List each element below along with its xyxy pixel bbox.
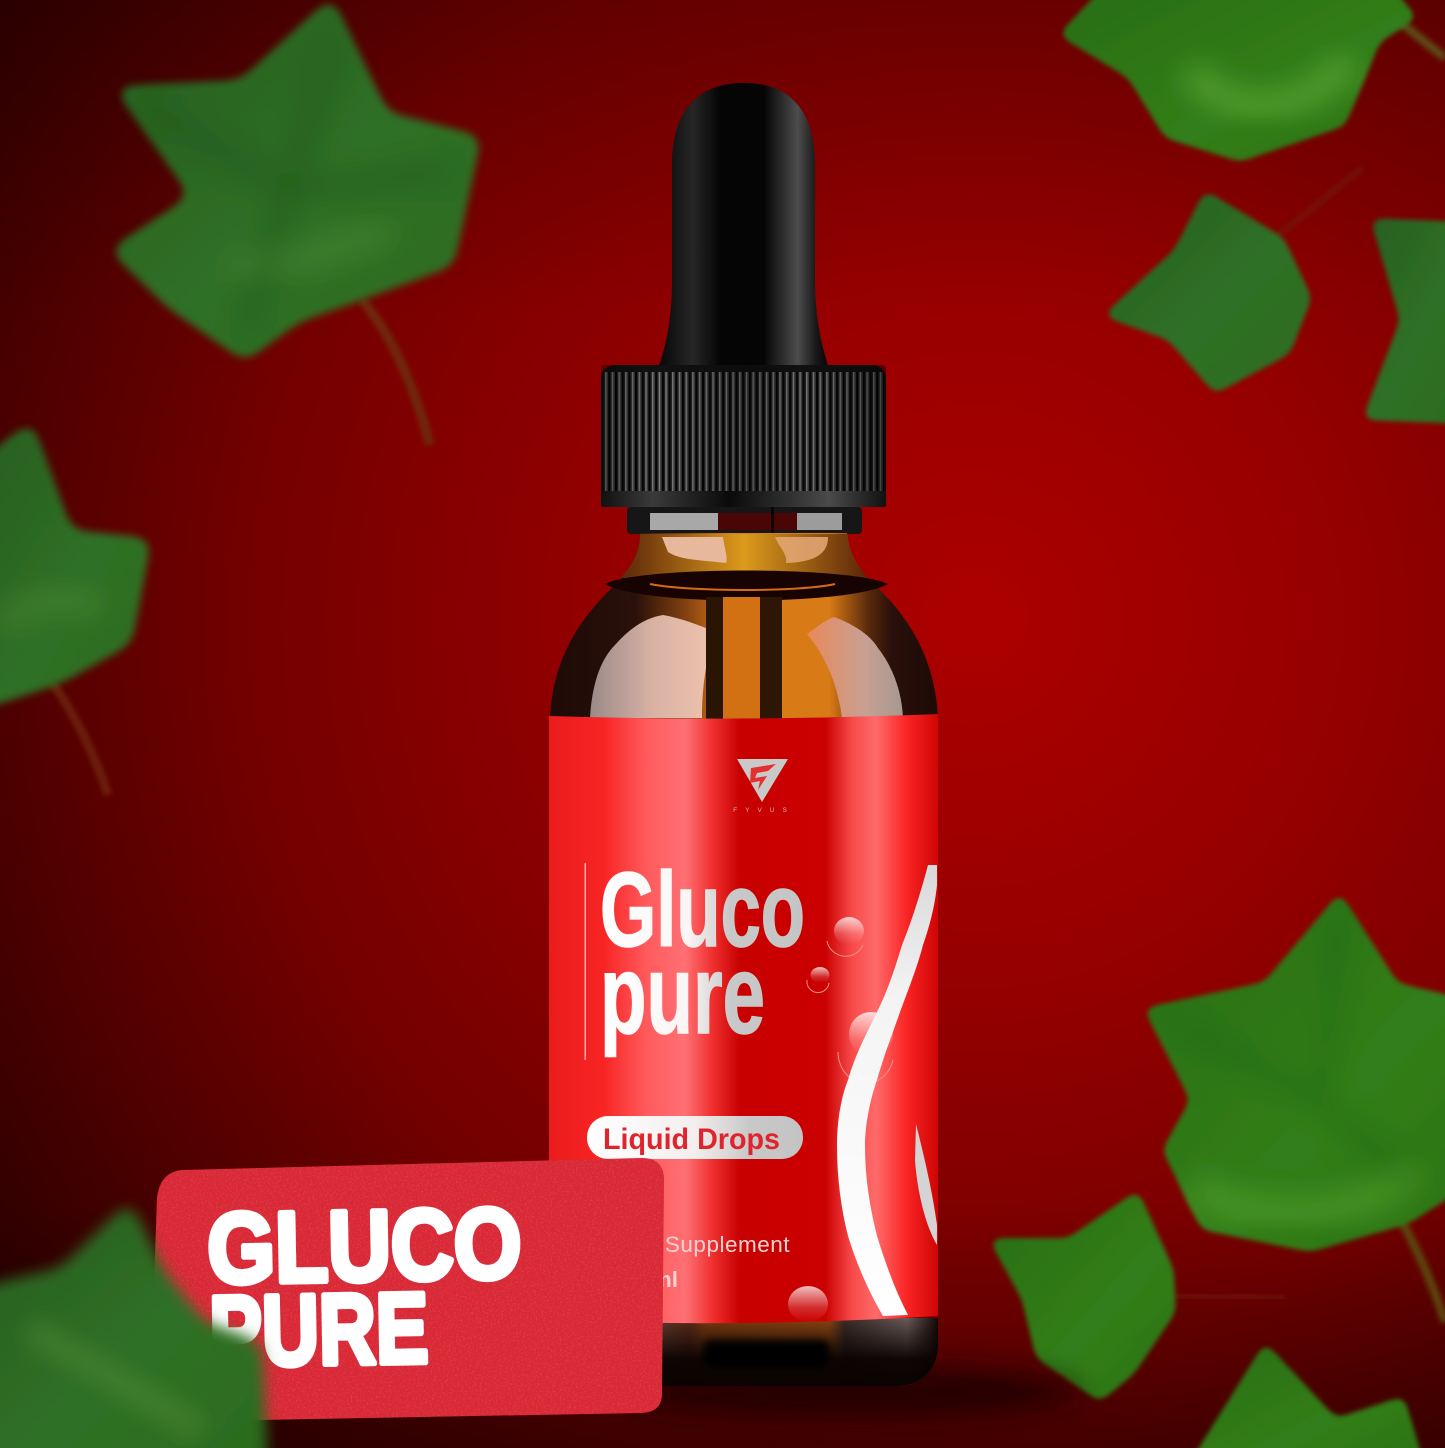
product name xyxy=(600,851,805,1057)
white sliver xyxy=(915,1124,937,1245)
card title: GLUCO xyxy=(206,1188,522,1305)
vertical rule xyxy=(584,863,586,1060)
leaf: top right xyxy=(1058,0,1445,162)
leaf: bottom right xyxy=(1185,1342,1426,1448)
card title: PURE xyxy=(208,1272,429,1388)
water drop xyxy=(838,1012,893,1084)
ground shadow xyxy=(620,1366,1080,1418)
water drop xyxy=(807,967,830,993)
label xyxy=(549,714,938,1323)
dropper bulb xyxy=(659,83,828,366)
card title xyxy=(206,1188,522,1388)
brand logo: FYVUS xyxy=(733,807,795,814)
volume text: 30ml xyxy=(627,1267,678,1292)
card: gluco pure xyxy=(150,1158,664,1420)
glass shoulders xyxy=(550,533,938,720)
leaf: bottom left foreground xyxy=(0,1200,268,1448)
glass base xyxy=(550,1318,938,1386)
product bottle xyxy=(549,83,938,1386)
product name: Gluco xyxy=(600,851,805,969)
bottle neck ring xyxy=(627,507,862,534)
leaf: lower right large xyxy=(1143,892,1445,1322)
brand logo xyxy=(733,759,795,814)
liquid drops pill: Liquid Drops xyxy=(603,1123,780,1156)
leaf: right edge xyxy=(1362,218,1445,424)
leaf: top left xyxy=(108,0,482,445)
white swoosh xyxy=(837,865,937,1316)
leaf: lower right small xyxy=(988,1190,1285,1402)
water drop xyxy=(788,1286,828,1322)
supplement text: Dietary Supplement xyxy=(583,1232,790,1257)
cap xyxy=(601,365,886,507)
dropper tube xyxy=(706,597,782,719)
liquid drops pill xyxy=(587,1116,803,1159)
water drop xyxy=(827,917,864,956)
leaf: left edge xyxy=(0,420,152,795)
product name: pure xyxy=(600,932,765,1057)
leaf: upper right xyxy=(1102,168,1362,394)
